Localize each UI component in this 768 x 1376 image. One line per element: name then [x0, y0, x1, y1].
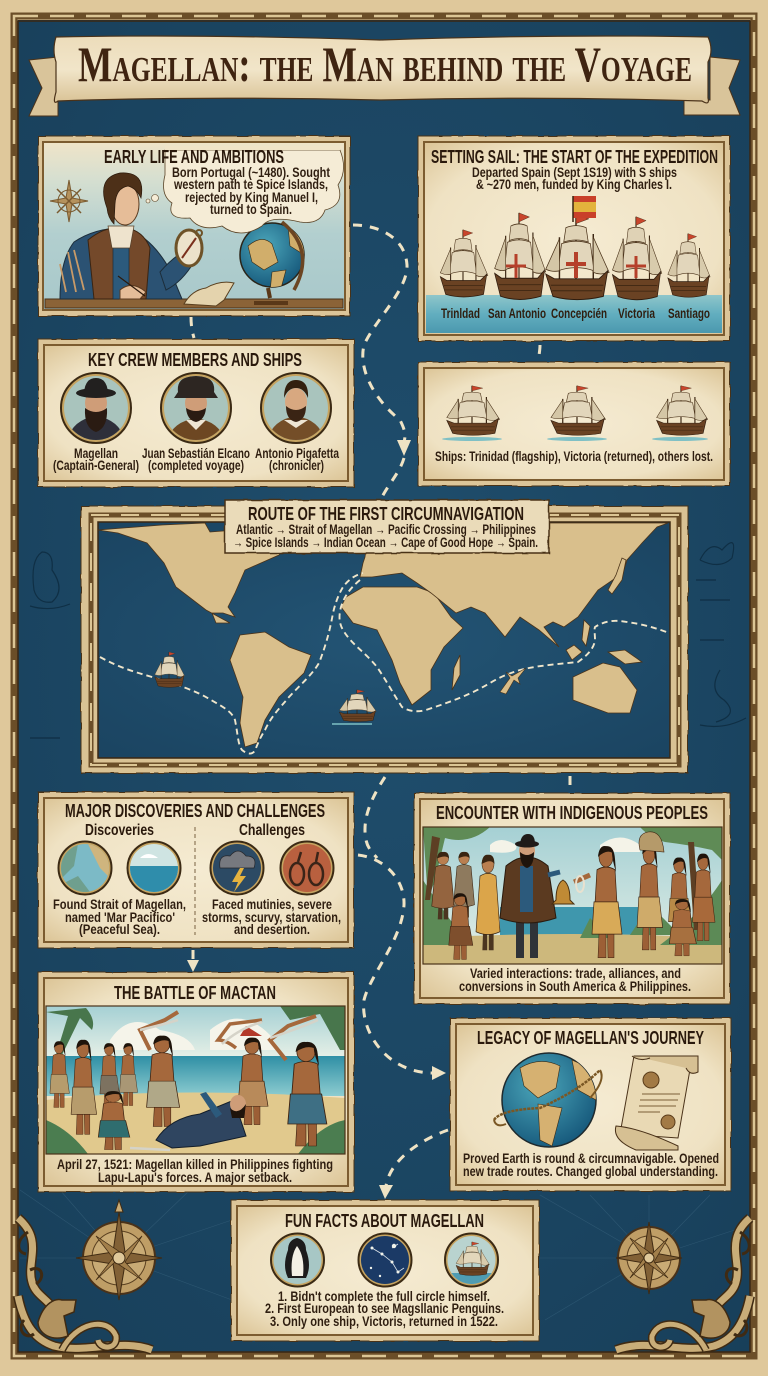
figure: warrior centre: [140, 1012, 180, 1127]
map ocean: [98, 522, 670, 758]
icon: ship in Pacific: [155, 652, 185, 687]
ship name labels: Victoria: [618, 306, 655, 321]
swords: [130, 1020, 318, 1150]
figure: crew man: [432, 852, 454, 919]
figure: native woman: [668, 858, 690, 922]
portrait: Elcano: [161, 373, 231, 445]
icon: globe with chain: [494, 1053, 602, 1147]
figure: woman in yellow: [476, 855, 500, 950]
caption: conversions in South America & Philippines.: [459, 979, 691, 994]
crew captions: (chronicler): [269, 458, 324, 473]
crew captions: (completed voyage): [148, 458, 244, 473]
route title box: [225, 500, 549, 553]
panel: legacy: [450, 1018, 731, 1191]
panel: ships: [418, 362, 730, 486]
compass left: [76, 1200, 162, 1300]
crew captions: (Captain-General): [53, 458, 139, 473]
challenges text: Faced mutinies, severe: [212, 897, 332, 912]
discoveries text: [53, 897, 186, 937]
facts list: [265, 1289, 504, 1329]
figure: fallen Magellan: [156, 1092, 246, 1148]
figure: warrior red headdress: [218, 1020, 268, 1125]
caption: Varied interactions: trade, alliances, and: [470, 966, 681, 981]
title banner: [29, 36, 740, 116]
thought bubble: [146, 146, 344, 233]
challenges text: storms, scurvy, starvation,: [202, 910, 341, 925]
icon: ship three: [652, 386, 708, 441]
route text: → Spice Islands → Indian Ocean → Cape of Good Hope → Spain.: [233, 535, 538, 550]
ship: Victoria: [612, 217, 662, 300]
desk: [45, 299, 343, 308]
crew captions: Juan Sebastián Elcano: [142, 446, 250, 461]
icon: pocket compass: [176, 230, 202, 266]
ship: Santiago: [668, 234, 710, 297]
compass rays decoration: [20, 1190, 750, 1320]
ship: San Antonio: [495, 213, 546, 299]
icon: constellation: [358, 1234, 412, 1286]
dashed voyage paths: [187, 225, 570, 1199]
discoveries text: named 'Mar Pacifico': [65, 910, 175, 925]
challenges text: [202, 897, 341, 937]
panel: battle of Mactan: [38, 972, 354, 1192]
figure: native trader: [592, 846, 622, 958]
icon: rolled scroll: [184, 282, 234, 306]
crew captions: Antonio Pigafetta: [255, 446, 339, 461]
heading: THE BATTLE OF MACTAN: [114, 983, 276, 1003]
icon: peaceful sea: [128, 842, 180, 894]
icon: desk globe: [240, 222, 310, 303]
route text: Atlantic → Strait of Magellan → Pacific Crossing → Philippines: [236, 522, 536, 537]
illustration: young Magellan: [60, 173, 194, 299]
icon: compass rose: [50, 180, 88, 222]
sea band: [426, 295, 722, 333]
facts list: 1. Bidn't complete the full circle himself.: [278, 1289, 490, 1304]
banner ribbon tails: [29, 57, 740, 116]
fleet of five ships: [440, 196, 710, 300]
icon: strait map: [58, 842, 112, 894]
panel: encounter with indigenous peoples: [414, 793, 730, 1004]
route heading: ROUTE OF THE FIRST CIRCUMNAVIGATION: [248, 504, 524, 524]
icon: ship one: [442, 386, 502, 441]
crew captions: [53, 446, 339, 473]
heading: FUN FACTS ABOUT MAGELLAN: [285, 1211, 484, 1231]
departure text: [472, 165, 677, 192]
ship name labels: [441, 306, 710, 321]
continents: [98, 523, 668, 747]
legacy text: [463, 1151, 719, 1179]
discoveries text: (Peaceful Sea).: [79, 922, 160, 937]
route text: [233, 522, 538, 550]
portrait: Magellan: [61, 373, 131, 445]
caption: April 27, 1521: Magellan killed in Philippines fighting: [57, 1157, 333, 1172]
discoveries text: Found Strait of Magellan,: [53, 897, 186, 912]
icon: penguin: [271, 1234, 324, 1286]
icon: chains: [280, 842, 334, 894]
ship name labels: Concepcién: [551, 306, 607, 321]
icon: small ship on route: [500, 668, 526, 694]
compass right: [616, 1222, 682, 1294]
ship: Trinidad: [440, 230, 488, 297]
figure: kneeling left: [449, 893, 473, 959]
biography text: rejected by King Manuel I,: [185, 190, 318, 205]
ship name labels: San Antonio: [488, 306, 546, 321]
figure: crew man two: [454, 852, 474, 917]
icon: parchment scroll: [615, 1056, 698, 1150]
figure: kneeling warrior: [98, 1091, 130, 1150]
panel: fun facts: [231, 1200, 539, 1341]
caption: Lapu-Lapu's forces. A major setback.: [98, 1170, 292, 1185]
crew captions: Magellan: [74, 446, 118, 461]
ship: Concepción: [546, 196, 609, 300]
scene illustration: [423, 827, 722, 964]
scene illustration: [46, 1006, 345, 1154]
biography text: [172, 165, 330, 217]
facts list: 3. Only one ship, Victoris, returned in 1522.: [270, 1314, 498, 1329]
panel: key crew members: [38, 339, 354, 487]
heading: EARLY LIFE AND AMBITIONS: [104, 147, 284, 167]
subheadings: [85, 822, 305, 839]
subheadings: Discoveries: [85, 822, 154, 839]
icon: bell: [552, 880, 574, 904]
biography text: turned to Spain.: [210, 202, 292, 217]
panel: early life and ambitions: [38, 136, 350, 316]
caption: [57, 1157, 333, 1185]
biography text: Born Portugal (~1480). Sought: [172, 165, 330, 180]
corner ornament left: [18, 1218, 152, 1350]
panel: setting sail: [418, 136, 730, 341]
portrait: Pigafetta: [261, 373, 331, 445]
panel: route map: [81, 506, 688, 773]
figure: kneeling right: [669, 899, 696, 956]
biography text: western path te Spice Islands,: [173, 177, 328, 192]
heading: MAJOR DISCOVERIES AND CHALLENGES: [65, 801, 325, 821]
caption: [459, 966, 691, 994]
figure: chief with headdress: [637, 832, 664, 950]
icon: storm: [210, 842, 264, 894]
figures: left warriors: [50, 1040, 138, 1134]
icon: ship two: [547, 386, 607, 441]
icon: ship: [445, 1234, 498, 1287]
sketch: sea monsters and clouds outside map: [30, 543, 746, 738]
heading: KEY CREW MEMBERS AND SHIPS: [88, 350, 302, 370]
departure text: & ~270 men, funded by King Charles I.: [476, 177, 672, 192]
figure: warrior blue skirt: [270, 1016, 327, 1146]
ship name labels: Trinldad: [441, 306, 480, 321]
challenges text: and desertion.: [234, 922, 310, 937]
ship name labels: Santiago: [668, 306, 710, 321]
subheadings: Challenges: [239, 822, 305, 839]
circumnavigation route: [100, 573, 669, 754]
corner ornament right: [616, 1218, 750, 1350]
facts list: 2. First European to see Magsllanic Penguins.: [265, 1301, 504, 1316]
icon: ship in Indian Ocean approach: [332, 690, 376, 724]
figure: Magellan: [500, 834, 560, 958]
panel: discoveries and challenges: [38, 792, 354, 948]
figure: native woman two: [692, 854, 715, 941]
departure text: Departed Spain (Sept 1S19) with S ships: [472, 165, 677, 180]
